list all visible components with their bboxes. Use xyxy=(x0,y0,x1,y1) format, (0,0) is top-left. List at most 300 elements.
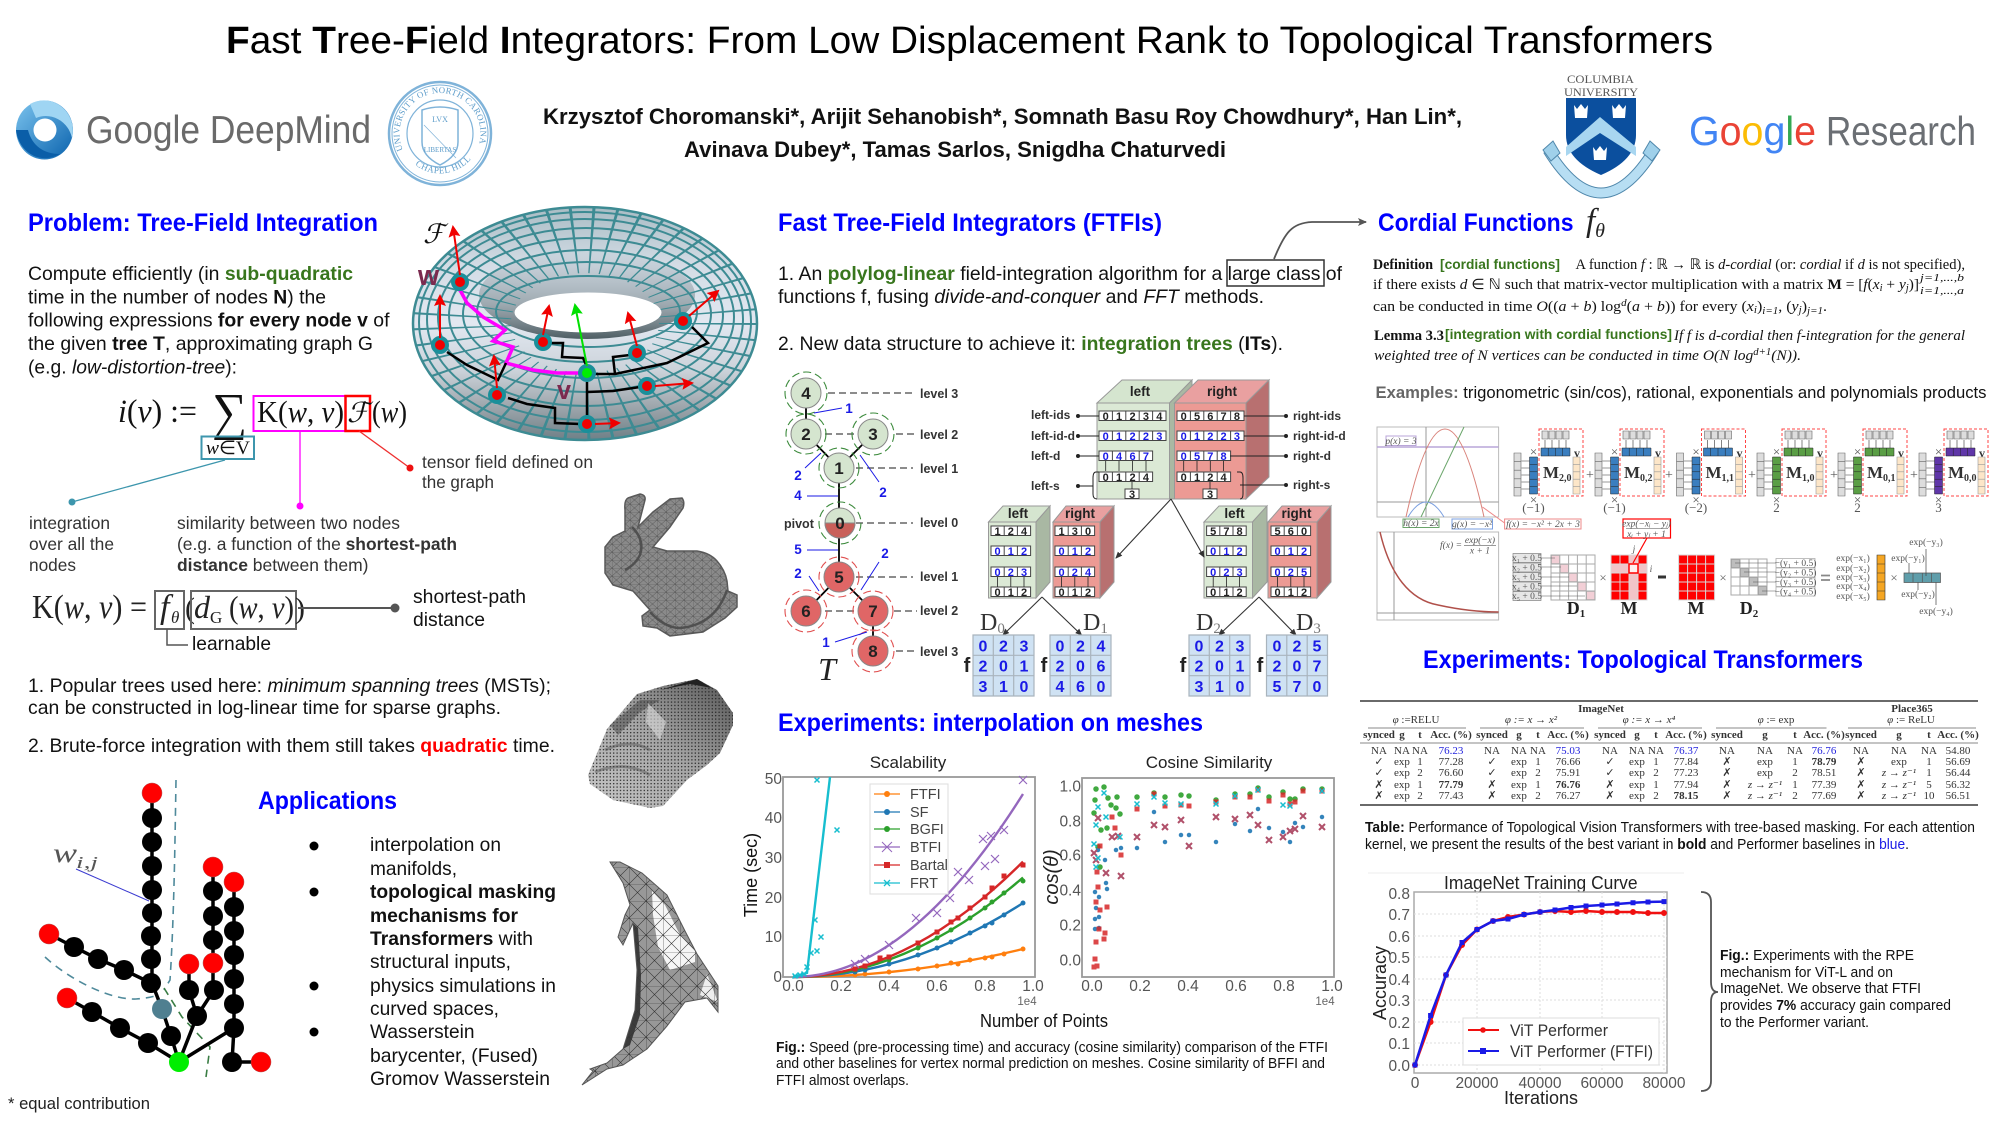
sub-chart: root node: 5 xyxy=(1194,451,1200,463)
chart: tree diagram T with levels: 2 xyxy=(881,546,889,561)
chart: tree diagram T with levels: level 2 xyxy=(920,604,958,618)
chart: scalability: 0.0 xyxy=(782,978,804,995)
table: topological vision transformer results: ✗ xyxy=(1856,767,1866,779)
table: topological vision transformer results: exp xyxy=(1511,779,1527,791)
logo: UNC seal: LVX xyxy=(432,115,448,124)
formula: kernel K: ) xyxy=(295,592,305,625)
table: topological vision transformer results: NA xyxy=(1394,745,1410,757)
table: topological vision transformer results: 1 xyxy=(1653,756,1659,768)
table: topological vision transformer results: NA xyxy=(1371,745,1387,757)
sub-chart: level 1 nodes: 2 xyxy=(1288,567,1294,579)
sub-chart: root node: 6 xyxy=(1207,411,1213,423)
chart: tree partition diagram xyxy=(39,780,271,1077)
table: topological vision transformer results: exp xyxy=(1511,790,1527,802)
table: topological vision transformer results: 77.84 xyxy=(1674,756,1699,768)
annotation: similarity xyxy=(177,513,457,575)
logo: Google Research: Research xyxy=(1826,108,1976,154)
table: topological vision transformer results: 76.66 xyxy=(1556,756,1581,768)
text block: definition: . xyxy=(1823,299,1827,315)
sub-chart: root node: 3 xyxy=(1207,489,1213,501)
table: topological vision transformer results: exp xyxy=(1629,779,1645,791)
table: topological vision transformer results: z → z⁻¹ xyxy=(1881,790,1916,802)
table: topological vision transformer results: 78.51 xyxy=(1812,767,1836,779)
panel: problem tree-field integration xyxy=(28,207,757,1090)
logo: Google DeepMind xyxy=(16,100,371,160)
table: topological vision transformer results: ✗ xyxy=(1856,756,1866,768)
table: topological vision transformer results: 1 xyxy=(1792,779,1798,791)
chart: low displacement rank matrix decomposition: × xyxy=(1854,492,1861,507)
chart: low displacement rank matrix decomposition: M xyxy=(1543,463,1559,482)
caption: training curve: to the Performer variant. xyxy=(1720,1015,1869,1031)
table: topological vision transformer results: Acc. (%) xyxy=(1430,729,1472,741)
sub-chart: rational decomposition: exp(−xᵢ − yⱼ) xyxy=(1622,518,1671,530)
chart: ImageNet training curve xyxy=(1368,873,1686,1108)
bullet list: structural inputs, xyxy=(370,951,511,973)
text block: lemma xyxy=(1374,326,1965,364)
chart: polynomial function plot: p(x) = 3 xyxy=(1384,436,1417,447)
chart: scalability: 0.8 xyxy=(974,978,996,995)
chart: low displacement rank matrix decomposition: M xyxy=(1948,463,1964,482)
table: topological vision transformer results: 76.76 xyxy=(1812,745,1837,757)
text block: problem statement: the given tree T, approximating graph G xyxy=(28,333,373,355)
chart: tree diagram T with levels: 4 xyxy=(801,384,811,403)
logo: Columbia University xyxy=(1543,74,1660,193)
logo: Columbia University: COLUMBIA xyxy=(1567,74,1635,86)
matrices D0 to D3: D xyxy=(980,610,997,636)
caption: training curve: ImageNet. We observe that FTFI xyxy=(1720,981,1921,997)
table: topological vision transformer results: NA xyxy=(1511,745,1527,757)
text block: definition: A function f : ℝ → ℝ is d-cordial (or: cordial if d is not specified), xyxy=(1576,257,1965,273)
bullet list: physics simulations in xyxy=(370,975,556,997)
chart: ImageNet training curve: 0.7 xyxy=(1388,907,1410,924)
sub-chart: level 1 nodes: 3 xyxy=(1237,567,1243,579)
table: topological vision transformer results: 1 xyxy=(1926,767,1932,779)
sub-chart: root node: 3 xyxy=(1234,431,1240,443)
table: topological vision transformer results: ✗ xyxy=(1722,790,1732,802)
sub-chart: level 1 nodes: 0 xyxy=(1210,567,1216,579)
chart: cosine similarity: 0.4 xyxy=(1177,978,1199,995)
matrices D0 to D3: 0 xyxy=(1236,679,1245,696)
chart: tree diagram T with levels: level 1 xyxy=(920,570,958,584)
sub-chart: rational decomposition: exp(−x₅) xyxy=(1836,591,1870,602)
matrices D0 to D3: 2 xyxy=(1215,638,1224,656)
sub-chart: rational decomposition xyxy=(1512,518,1953,620)
sub-chart: rational decomposition: exp(−y₄) xyxy=(1919,606,1953,617)
sub-chart: level 1 nodes: 5 xyxy=(1275,526,1281,538)
chart: ImageNet training curve: 40000 xyxy=(1518,1075,1562,1092)
chart: rational function plot: x + 1 xyxy=(1469,546,1490,556)
matrices D0 to D3: 3 xyxy=(979,679,988,696)
chart: low displacement rank matrix decomposition: × xyxy=(1692,492,1700,507)
panel: applications xyxy=(258,787,556,1090)
matrices D0 to D3: 2 xyxy=(979,658,988,676)
sub-chart: rational decomposition: x₄ + 0.5 xyxy=(1512,582,1542,592)
sub-chart: root node: 3 xyxy=(1156,431,1162,443)
text block: definition: j xyxy=(1904,283,1909,294)
formula: kernel K xyxy=(32,589,400,645)
sub-chart: root node xyxy=(1031,380,1346,501)
chart: cosine similarity: 0.8 xyxy=(1273,978,1295,995)
table: topological vision transformer results: 77.94 xyxy=(1674,779,1699,791)
matrices D0 to D3: 0 xyxy=(999,658,1008,676)
sub-chart: root node: 2 xyxy=(1207,431,1213,443)
sub-chart: level 1 nodes: 0 xyxy=(1059,546,1065,558)
sub-chart: rational decomposition: D xyxy=(1567,598,1580,618)
chart: low displacement rank matrix decomposition: + xyxy=(1665,468,1673,483)
matrices D0 to D3: 3 xyxy=(1195,679,1204,696)
sub-chart: level 1 nodes: 0 xyxy=(995,546,1001,558)
chart: polynomial function plot: g(x) = −x² xyxy=(1452,519,1492,530)
formula: integral i(v): i(v) := xyxy=(118,394,197,430)
panel: fast tree-field integrators xyxy=(778,209,1366,696)
chart: ImageNet training curve: 80000 xyxy=(1642,1075,1686,1092)
heading: experiments meshes: Experiments: interpolation on meshes xyxy=(778,709,1203,737)
chart: tree diagram T with levels: 8 xyxy=(868,642,878,661)
sub-chart: level 1 nodes: 1 xyxy=(1223,546,1229,558)
logo: Google Research xyxy=(1689,108,1976,154)
logo: UNC seal xyxy=(388,80,492,186)
table: topological vision transformer results: NA xyxy=(1853,745,1869,757)
table: topological vision transformer results: φ := x → x² xyxy=(1505,714,1558,726)
chart: scalability xyxy=(741,753,1044,1008)
sub-chart: level 1 nodes: 0 xyxy=(995,567,1001,579)
chart: polynomial function plot xyxy=(1377,427,1581,530)
table: topological vision transformer results: 78.15 xyxy=(1674,790,1699,802)
chart: scalability: Scalability xyxy=(870,753,947,772)
matrices D0 to D3: 2 xyxy=(1273,658,1282,676)
chart: torus with tree and field vectors: v xyxy=(557,375,571,405)
table: topological vision transformer results: t xyxy=(1536,729,1540,741)
sub-chart: root node: 2 xyxy=(1129,431,1136,443)
text block: definition xyxy=(1373,256,1965,317)
text block: problem statement xyxy=(28,263,390,378)
table: topological vision transformer results: 10 xyxy=(1924,790,1935,802)
table: topological vision transformer results: NA xyxy=(1484,745,1500,757)
sub-chart: level 1 nodes: left xyxy=(1224,506,1245,521)
chart: low displacement rank matrix decomposition: 3 xyxy=(1935,500,1942,515)
sub-chart: rational decomposition: exp(−x₃) xyxy=(1836,572,1870,583)
chart: low displacement rank matrix decomposition: M xyxy=(1624,463,1640,482)
table: topological vision transformer results: exp xyxy=(1629,790,1645,802)
chart: tree diagram T with levels: 4 xyxy=(794,488,802,503)
matrices D0 to D3: f xyxy=(1257,655,1264,677)
legend: Bartal xyxy=(910,858,948,874)
table: topological vision transformer results: z → z⁻¹ xyxy=(1747,779,1782,791)
table: topological vision transformer results: 76.76 xyxy=(1556,779,1581,791)
chart: tree diagram T with levels: pivot xyxy=(784,517,815,531)
matrices D0 to D3: 0 xyxy=(1076,658,1085,676)
sub-chart: level 1 nodes: 3 xyxy=(1021,567,1027,579)
table: topological vision transformer results: 1 xyxy=(1417,756,1423,768)
heading: FTFIs: Fast Tree-Field Integrators (FTFIs) xyxy=(778,209,1162,237)
table: topological vision transformer results: z → z⁻¹ xyxy=(1881,779,1916,791)
text block: definition: Definition xyxy=(1373,257,1433,273)
sub-chart: root node: left-ids xyxy=(1031,408,1071,422)
sub-chart: rational decomposition: i xyxy=(1650,565,1653,575)
legend: ViT Performer xyxy=(1510,1021,1608,1040)
table: topological vision transformer results: NA xyxy=(1648,745,1664,757)
chart: scalability: 1.0 xyxy=(1022,978,1044,995)
chart: cosine similarity: 0.4 xyxy=(1059,882,1081,900)
sub-chart: level 1 nodes: 0 xyxy=(1210,546,1216,558)
chart: cosine similarity: 0.0 xyxy=(1059,952,1081,970)
formula: integral i(v): ∑ xyxy=(212,384,247,441)
sub-chart: rational decomposition: × xyxy=(1890,570,1898,585)
sub-chart: rational decomposition: x₅ + 0.5 xyxy=(1512,592,1542,602)
table: topological vision transformer results: t xyxy=(1927,729,1931,741)
sub-chart: root node: right-id-d xyxy=(1293,429,1346,443)
table: topological vision transformer results: z → z⁻¹ xyxy=(1881,767,1916,779)
sub-chart: level 1 nodes: 8 xyxy=(1237,526,1243,538)
annotation: similarity: (e.g. a function of the shortest-path xyxy=(177,534,457,554)
sub-chart: root node: 8 xyxy=(1221,451,1227,463)
callout: large class box xyxy=(1227,260,1324,286)
chart: low displacement rank matrix decomposition: × xyxy=(1530,492,1537,507)
table: topological vision transformer results: 1 xyxy=(1535,756,1541,768)
sub-chart: level 1 nodes: 0 xyxy=(1085,526,1091,538)
text block: lemma: (N)). xyxy=(1771,348,1801,364)
matrices D0 to D3: 6 xyxy=(1076,679,1085,696)
sub-chart: root node: 7 xyxy=(1207,451,1213,463)
chart: low displacement rank matrix decomposition: + xyxy=(1830,468,1838,483)
sub-chart: root node: 7 xyxy=(1221,411,1227,423)
chart: low displacement rank matrix decomposition: × xyxy=(1935,492,1942,507)
chart: ImageNet training curve: 0.1 xyxy=(1388,1036,1410,1053)
title: Fast Tree-Field Integrators: From Low Displacement Rank to Topological Transformers xyxy=(226,20,1713,62)
chart: low displacement rank matrix decomposition: 2,0 xyxy=(1559,473,1572,484)
sub-chart: root node: 1 xyxy=(1116,431,1122,443)
sub-chart: root node: 1 xyxy=(1194,472,1200,484)
chart: polynomial function plot: f(x) = −x² + 2x + 3 xyxy=(1506,519,1580,530)
matrices D0 to D3: 2 xyxy=(999,638,1008,656)
chart: scalability: 0.6 xyxy=(926,978,948,995)
matrices D0 to D3: 0 xyxy=(1020,679,1029,696)
bullet list: interpolation on xyxy=(370,834,501,856)
table: topological vision transformer results: ✓ xyxy=(1374,756,1384,768)
chart: low displacement rank matrix decomposition: M xyxy=(1786,463,1802,482)
chart: tree diagram T with levels: level 0 xyxy=(920,516,958,530)
sub-chart: root node: 1 xyxy=(1116,472,1122,484)
table: topological vision transformer results: NA xyxy=(1719,745,1735,757)
sub-chart: root node: left-id-d xyxy=(1031,429,1075,443)
table: topological vision transformer results: φ := ReLU xyxy=(1887,714,1935,726)
chart: tree diagram T with levels: 3 xyxy=(868,425,878,444)
sub-chart: root node: 2 xyxy=(1221,431,1227,443)
chart: low displacement rank matrix decomposition: M xyxy=(1867,463,1883,482)
text block: problem statement: following expressions for every node v of xyxy=(28,310,390,332)
chart: low displacement rank matrix decomposition: + xyxy=(1910,468,1918,483)
chart: ImageNet training curve: Iterations xyxy=(1504,1088,1578,1108)
sub-chart: level 1 nodes: 6 xyxy=(1288,526,1294,538)
sub-chart: level 1 nodes: 2 xyxy=(1085,546,1091,558)
sub-chart: level 1 nodes: left xyxy=(1008,506,1029,521)
legend xyxy=(870,784,948,894)
sub-chart: level 1 nodes: 1 xyxy=(1008,587,1014,599)
formula: integral i(v): (w) xyxy=(372,394,407,429)
text block: FTFI description: 1. An polylog-linear field-integration algorithm for a large class of xyxy=(778,263,1343,285)
matrices D0 to D3: 3 xyxy=(1236,638,1245,656)
sub-chart: rational decomposition: j xyxy=(1631,545,1636,555)
table: topological vision transformer results: ✗ xyxy=(1487,790,1497,802)
sub-chart: root node: right xyxy=(1207,384,1237,399)
table: topological vision transformer results: 77.28 xyxy=(1439,756,1464,768)
chart: scalability: 50 xyxy=(765,771,782,788)
sub-chart: root node: 0 xyxy=(1103,472,1109,484)
sub-chart: root node: left-s xyxy=(1031,479,1060,493)
table: topological vision transformer results: NA xyxy=(1629,745,1645,757)
chart: ImageNet training curve: 0.3 xyxy=(1388,993,1410,1010)
text block: definition: i xyxy=(1754,305,1757,316)
chart: ImageNet training curve: 0 xyxy=(1411,1075,1420,1092)
sub-chart: root node: left xyxy=(1130,384,1151,399)
footnote: * equal contribution xyxy=(8,1094,150,1113)
sub-chart: level 1 nodes: 2 xyxy=(1021,587,1027,599)
table: topological vision transformer results: ✓ xyxy=(1487,767,1497,779)
panel: experiments interpolation on meshes xyxy=(741,709,1343,1089)
text block: lemma: If f is d-cordial then f-integration for the general xyxy=(1673,328,1965,344)
table: topological vision transformer results: 2 xyxy=(1417,790,1423,802)
chart: cosine similarity: 1.0 xyxy=(1321,978,1343,995)
matrices D0 to D3: 1 xyxy=(999,679,1008,696)
matrices D0 to D3: 0 xyxy=(1097,679,1106,696)
text block: definition: j xyxy=(1796,305,1802,316)
sub-chart: root node: left-d xyxy=(1031,449,1060,463)
chart: low displacement rank matrix decomposition xyxy=(1512,429,1988,620)
chart: cosine similarity: 0.8 xyxy=(1059,814,1081,830)
sub-chart: level 1 nodes: 0 xyxy=(1275,587,1281,599)
text block: FTFI description xyxy=(778,263,1343,355)
chart: tree diagram T with levels: level 3 xyxy=(920,645,958,659)
bullet list: mechanisms for xyxy=(370,905,518,927)
text block: popular trees xyxy=(28,675,555,757)
sub-chart: root node: 5 xyxy=(1194,411,1200,423)
sub-chart: root node: 0 xyxy=(1103,411,1109,423)
table: topological vision transformer results: 76.60 xyxy=(1439,767,1464,779)
panel: topological transformers xyxy=(1360,646,1979,1108)
chart: low displacement rank matrix decomposition: v xyxy=(1979,446,1985,460)
table: topological vision transformer results: ✓ xyxy=(1605,767,1615,779)
chart: torus with tree and field vectors: ℱ xyxy=(423,219,449,250)
arrow: large class to cordial functions xyxy=(1274,222,1366,259)
annotation: tensor field xyxy=(422,452,593,492)
table: topological vision transformer results: 2 xyxy=(1535,767,1541,779)
sub-chart: rational decomposition: −(y₃ + 0.5) xyxy=(1775,577,1816,588)
caption: table xyxy=(1365,819,1975,853)
chart: ImageNet training curve: 0.8 xyxy=(1388,886,1410,903)
table: topological vision transformer results: exp xyxy=(1629,767,1645,779)
table: topological vision transformer results: NA xyxy=(1757,745,1773,757)
chart: tree diagram T with levels: 6 xyxy=(801,602,811,621)
chart: low displacement rank matrix decomposition: 2 xyxy=(1854,500,1861,515)
matrices D0 to D3: f xyxy=(1180,655,1187,677)
legend xyxy=(1463,1018,1659,1065)
chart: low displacement rank matrix decomposition: × xyxy=(1773,492,1780,507)
text block: lemma: Lemma 3.3 xyxy=(1374,328,1444,344)
table: topological vision transformer results: exp xyxy=(1394,756,1410,768)
matrices D0 to D3: f xyxy=(1041,655,1048,677)
chart: low displacement rank matrix decomposition: M xyxy=(1706,463,1722,482)
table: topological vision transformer results: 1 xyxy=(1535,779,1541,791)
text block: definition: j=1 xyxy=(1805,306,1823,317)
bullet list: Transformers with xyxy=(370,928,533,950)
sub-chart: level 1 nodes: 4 xyxy=(1085,567,1092,579)
table: topological vision transformer results: 56.44 xyxy=(1946,767,1971,779)
text block: problem statement: Compute efficiently (in sub-quadratic xyxy=(28,263,353,285)
chart: tree diagram T with levels: 1 xyxy=(845,401,853,416)
x axis label: number of points: Number of Points xyxy=(980,1011,1108,1031)
table: topological vision transformer results: 77.39 xyxy=(1812,779,1837,791)
sub-chart: level 1 nodes: 2 xyxy=(1301,546,1307,558)
text block: problem statement: (e.g. low-distortion-tree): xyxy=(28,356,237,378)
logo: UNC seal: UNIVERSITY OF NORTH CAROLINA xyxy=(394,87,486,152)
arrows: tree splits xyxy=(1003,499,1296,635)
table: topological vision transformer results: φ := exp xyxy=(1758,714,1795,726)
chart: low displacement rank matrix decomposition: 0,0 xyxy=(1964,473,1977,484)
chart: tree diagram T with levels: 2 xyxy=(794,468,802,483)
sub-chart: level 1 nodes: 2 xyxy=(1008,526,1014,538)
matrices D0 to D3: 0 xyxy=(1215,658,1224,676)
sub-chart: rational decomposition: 1 xyxy=(1580,608,1585,620)
sub-chart: level 1 nodes: 1 xyxy=(1072,546,1078,558)
chart: rational function plot: f(x) = xyxy=(1440,540,1462,551)
legend: BTFI xyxy=(910,840,941,856)
sub-chart: rational decomposition: × xyxy=(1599,570,1607,585)
bullet list: topological masking xyxy=(370,881,556,903)
bullet list: barycenter, (Fused) xyxy=(370,1045,538,1067)
table: topological vision transformer results: 2 xyxy=(1792,790,1798,802)
annotation: shortest-path distance xyxy=(413,586,526,631)
text block: lemma: [integration with cordial functions] xyxy=(1445,326,1672,342)
sub-chart: rational decomposition: exp(−y₁) xyxy=(1891,553,1925,564)
matrices D0 to D3: D xyxy=(1083,610,1100,636)
caption: meshes figure: and other baselines for vertex normal prediction on meshes. Cosine similarity of BFFI and xyxy=(776,1056,1325,1072)
caption: meshes figure xyxy=(776,1040,1328,1089)
table: topological vision transformer results: Place365 xyxy=(1891,703,1933,715)
table: topological vision transformer results: ✗ xyxy=(1605,790,1615,802)
table: topological vision transformer results: 2 xyxy=(1417,767,1423,779)
bullet list: manifolds, xyxy=(370,858,457,880)
sub-chart: level 1 nodes: 2 xyxy=(1085,587,1091,599)
sub-chart: root node: 2 xyxy=(1207,472,1213,484)
chart: ImageNet training curve: 60000 xyxy=(1580,1075,1624,1092)
logo: Columbia University: UNIVERSITY xyxy=(1564,85,1638,99)
authors: Avinava Dubey*, Tamas Sarlos, Snigdha Chaturvedi xyxy=(684,137,1226,162)
chart: low displacement rank matrix decomposition: v xyxy=(1655,446,1661,460)
chart: scalability: 0.4 xyxy=(878,978,900,995)
table: topological vision transformer results: t xyxy=(1793,729,1797,741)
table: topological vision transformer results: t xyxy=(1654,729,1658,741)
chart: low displacement rank matrix decomposition: × xyxy=(1935,444,1942,459)
table: topological vision transformer results: synced xyxy=(1363,729,1395,741)
table: topological vision transformer results: 2 xyxy=(1653,767,1659,779)
bullet list: Wasserstein xyxy=(370,1021,474,1043)
table: topological vision transformer results: 76.23 xyxy=(1439,745,1464,757)
text block: problem statement: time in the number of nodes N) the xyxy=(28,286,326,308)
table: topological vision transformer results: 75.91 xyxy=(1556,767,1580,779)
chart: cosine similarity: Cosine Similarity xyxy=(1146,753,1273,772)
chart: ImageNet training curve: 0.4 xyxy=(1388,972,1410,989)
sub-chart: root node: right-s xyxy=(1293,478,1331,492)
sub-chart: root node: right-d xyxy=(1293,449,1331,463)
chart: scalability: 0.2 xyxy=(830,978,852,995)
sub-chart: level 1 nodes: 0 xyxy=(1059,587,1065,599)
table: topological vision transformer results: 5 xyxy=(1926,779,1932,791)
text block: definition: i xyxy=(1880,283,1883,294)
annotation: tensor field: the graph xyxy=(422,472,494,492)
matrices D0 to D3: 1 xyxy=(1236,658,1245,676)
table: topological vision transformer results: 1 xyxy=(1926,756,1932,768)
table: topological vision transformer results xyxy=(1360,701,1979,805)
